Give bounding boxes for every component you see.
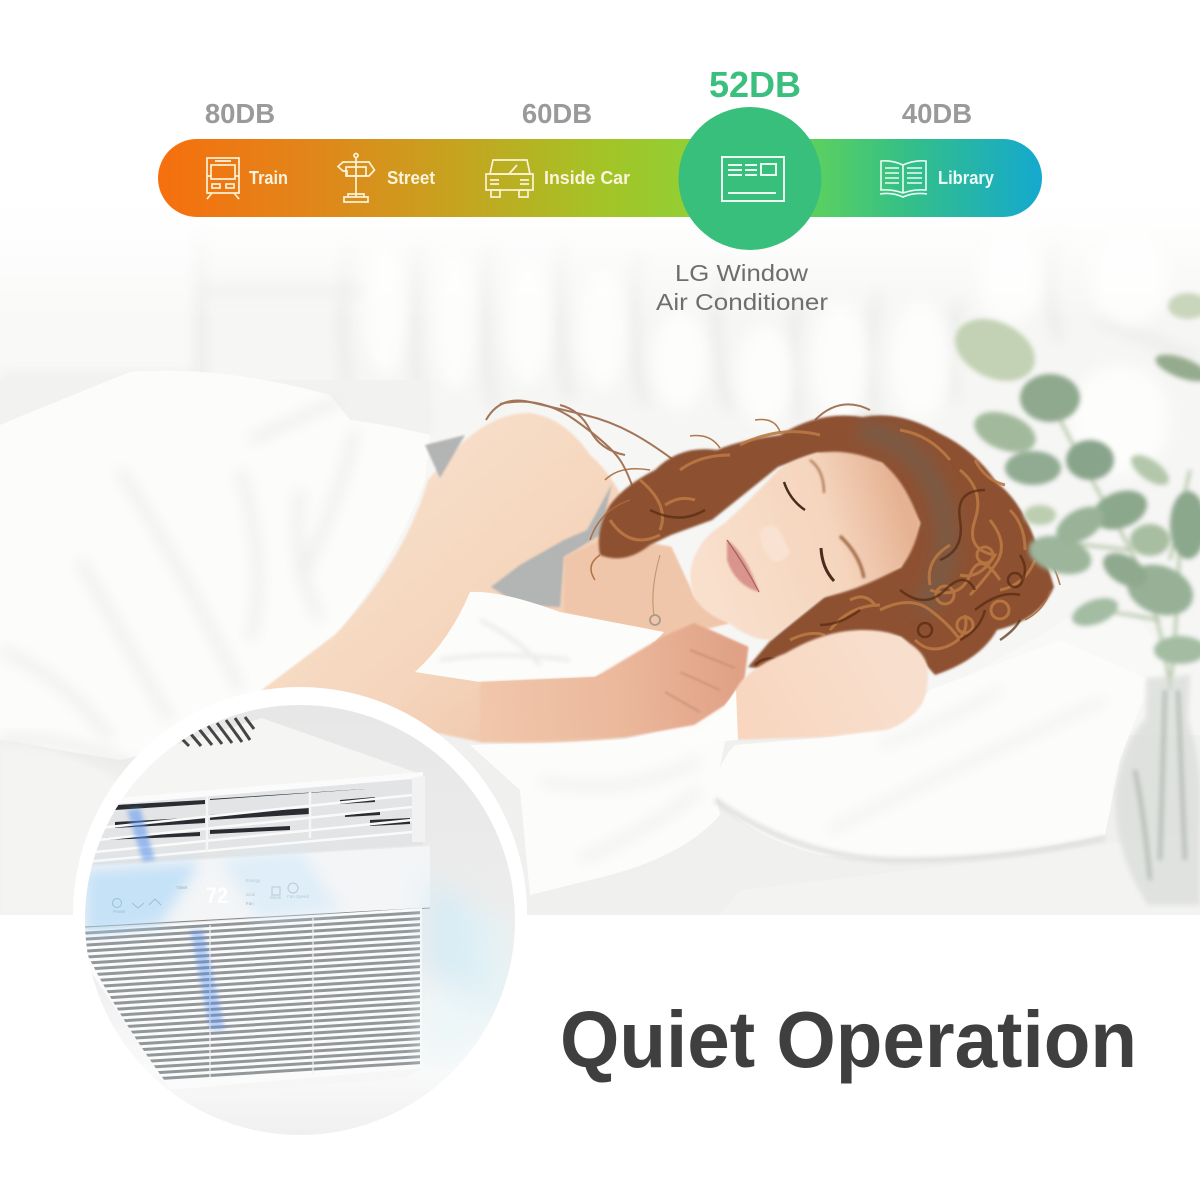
control panel: Energy [246, 878, 261, 883]
unit top [124, 718, 415, 798]
plant [945, 293, 1200, 690]
label: 60DB: 60DB [522, 98, 592, 129]
temperature display: 72 [206, 883, 228, 908]
chest [563, 542, 728, 629]
decibel labels [205, 64, 972, 129]
caption: LG Window Air Conditioner: LG Window [675, 260, 808, 286]
headboard [338, 288, 348, 297]
title: Quiet Operation: Quiet Operation [560, 995, 1137, 1084]
icon: car [486, 160, 533, 197]
label: Train: Train [249, 167, 288, 188]
white fade at the top of the photo [0, 200, 1200, 270]
icon: street sign [338, 154, 374, 202]
necklace [650, 555, 660, 625]
control panel: Power [113, 909, 126, 914]
icon: window air conditioner [722, 157, 784, 201]
label: 80DB: 80DB [205, 98, 275, 129]
circular inset: air conditioner close-up [60, 687, 527, 1141]
label: 52DB: 52DB [709, 64, 801, 105]
face [690, 452, 920, 640]
woman's back hair wisps [485, 400, 870, 486]
lower intake grille [85, 908, 422, 1080]
hand [480, 623, 748, 742]
control panel: Fan [246, 901, 254, 906]
control panel [83, 846, 430, 927]
bed sheet [0, 380, 1200, 915]
hair [590, 415, 1060, 675]
bedroom photo: woman sleeping [0, 200, 1200, 915]
label: Inside Car: Inside Car [544, 167, 630, 188]
icon: open book [880, 161, 927, 197]
pillow [714, 735, 1129, 863]
duvet pulled into hand [724, 690, 738, 741]
closed eyes, brows, nose, lips [784, 482, 805, 510]
control panel: Timer [176, 885, 188, 890]
caption: LG Window Air Conditioner [656, 260, 828, 315]
control panel: Mode [270, 895, 282, 900]
lower duvet fold [470, 735, 725, 895]
upper air grille [85, 775, 425, 865]
blue cool air beams [127, 808, 225, 1030]
grey top [425, 435, 612, 607]
bunched duvet under chin [415, 592, 664, 682]
arm under head [727, 630, 928, 740]
label: Library: Library [938, 167, 995, 188]
top vent [181, 717, 254, 746]
label: Street: Street [387, 167, 435, 188]
duvet [0, 371, 430, 757]
gradient noise-level bar [158, 139, 1042, 217]
icon: train [207, 158, 239, 199]
control panel: Fan Speed [287, 894, 310, 899]
caption: LG Window Air Conditioner: Air Conditioner [656, 289, 828, 315]
woman's body and arm [262, 413, 748, 743]
glass vase [1116, 675, 1200, 905]
label: 40DB: 40DB [902, 98, 972, 129]
control panel: Cool [246, 892, 255, 897]
green highlight circle: LG air conditioner [678, 107, 822, 250]
